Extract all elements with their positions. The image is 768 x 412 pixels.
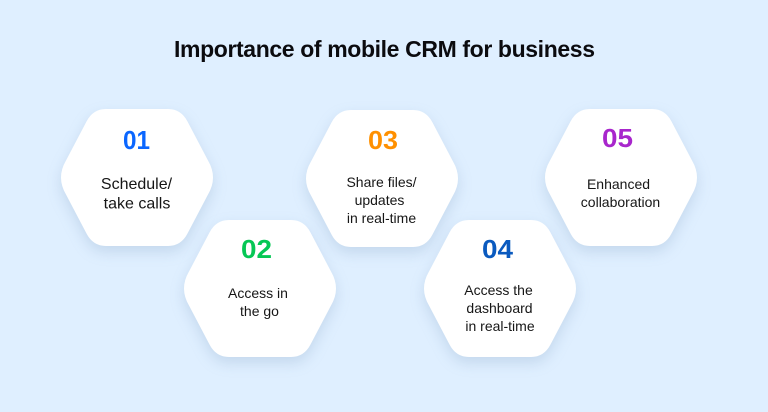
panel: 01 schedule calls: [61, 109, 213, 246]
label: access dashboard: Access the: [464, 282, 533, 298]
number 01: 01: [123, 127, 150, 155]
panel: 03 share files: [306, 110, 458, 247]
number 05: 05: [602, 125, 633, 153]
panel: 02 access on the go: [184, 220, 336, 357]
label: enhanced collaboration: Enhanced: [587, 176, 650, 192]
number 04: 04: [482, 236, 514, 264]
label: access in the go: Access in: [228, 285, 288, 301]
label: access in the go: the go: [240, 303, 279, 319]
label: enhanced collaboration: collaboration: [581, 194, 660, 210]
label: access dashboard: dashboard: [466, 300, 533, 316]
title: Importance of mobile CRM for business: [174, 36, 595, 62]
panel: 04 access dashboard: [424, 220, 576, 357]
label: schedule calls: take calls: [104, 196, 170, 212]
label: share files: updates: [355, 192, 404, 208]
number 02: 02: [241, 236, 272, 264]
panel: 05 enhanced collaboration: [545, 109, 697, 246]
label: schedule calls: Schedule/: [101, 176, 173, 193]
label: share files: Share files/: [346, 174, 417, 190]
label: share files: in real-time: [347, 210, 416, 226]
number 03: 03: [368, 127, 398, 155]
label: access dashboard: in real-time: [465, 318, 535, 334]
